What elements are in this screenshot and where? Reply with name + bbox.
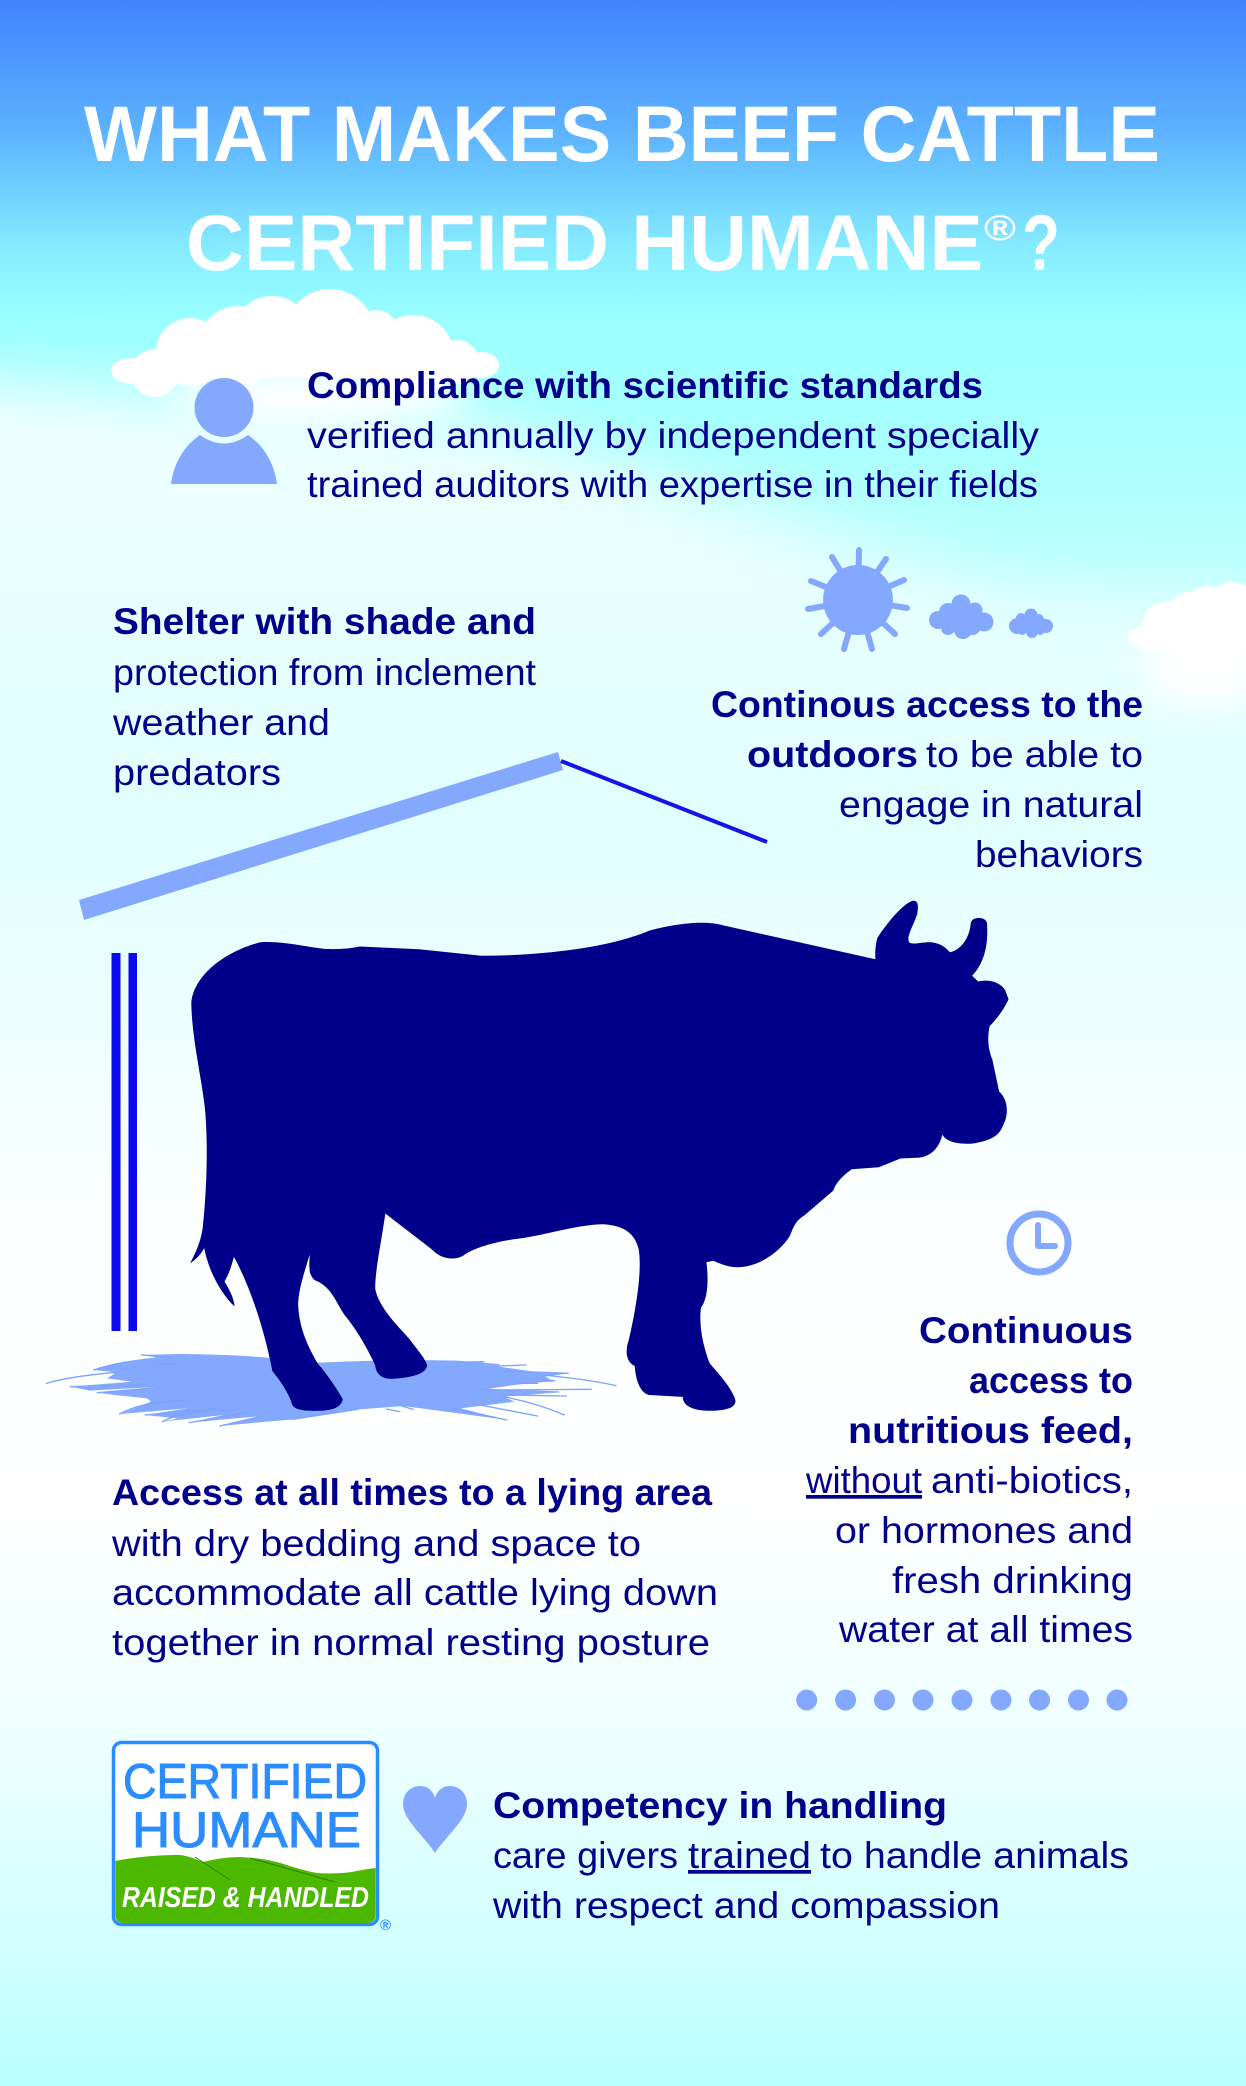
text: handling: trained	[688, 1835, 811, 1876]
text: shelter: weather and	[112, 702, 330, 743]
cloud: right edge	[1128, 582, 1246, 705]
text: nutritious feed: fresh drinking	[892, 1560, 1133, 1601]
title: ®	[984, 207, 1016, 248]
barn roof	[79, 752, 767, 920]
text: nutritious feed: water at all times	[838, 1609, 1133, 1650]
text: compliance	[307, 365, 1040, 505]
text: outdoors	[711, 684, 1143, 875]
text: handling: care givers	[493, 1835, 678, 1876]
text: compliance: verified annually by independent specially	[307, 415, 1040, 456]
text: outdoors: outdoors	[747, 734, 918, 775]
text: handling: with respect and compassion	[492, 1885, 1000, 1926]
logo: certified humane	[114, 1742, 391, 1934]
text: shelter: protection from inclement	[113, 652, 537, 693]
text: outdoors: to be able to	[926, 734, 1143, 775]
text: outdoors: behaviors	[975, 834, 1143, 875]
cloud: upper left	[111, 289, 499, 423]
text: lying area: together in normal resting posture	[112, 1622, 710, 1663]
text: nutritious feed: without	[805, 1460, 923, 1501]
logo: certified humane: ®	[380, 1917, 391, 1934]
text: outdoors: engage in natural	[839, 784, 1143, 825]
text: lying area	[111, 1472, 718, 1663]
icon: person	[171, 378, 277, 484]
text: shelter: Shelter with shade and	[113, 601, 536, 642]
title: ?	[1022, 198, 1060, 287]
text: nutritious feed: nutritious feed,	[848, 1410, 1133, 1451]
dotted divider	[796, 1690, 1128, 1710]
text: nutritious feed: Continuous	[919, 1310, 1133, 1351]
icon: large cloud	[929, 594, 994, 639]
text: lying area: accommodate all cattle lying down	[112, 1572, 718, 1613]
text: nutritious feed: anti-biotics,	[931, 1460, 1133, 1501]
cow silhouette	[190, 901, 1009, 1411]
text: handling: to handle animals	[820, 1835, 1129, 1876]
logo: certified humane: CERTIFIED	[123, 1755, 367, 1809]
pale veil across the sky	[0, 372, 1246, 860]
logo: certified humane: RAISED & HANDLED	[122, 1882, 369, 1914]
barn posts	[112, 953, 137, 1331]
icon: small cloud	[1009, 608, 1053, 638]
text: shelter	[112, 601, 537, 793]
text: nutritious feed	[805, 1310, 1133, 1650]
text: lying area: with dry bedding and space to	[111, 1523, 641, 1564]
straw bedding	[47, 1354, 616, 1426]
title	[84, 89, 1160, 287]
icon: sun	[808, 550, 907, 649]
text: handling: Competency in handling	[493, 1785, 947, 1826]
text: compliance: trained auditors with expertise in their fields	[307, 464, 1038, 505]
icon: clock	[1010, 1214, 1068, 1272]
text: nutritious feed: or hormones and	[835, 1510, 1133, 1551]
title: WHAT MAKES BEEF CATTLE	[84, 89, 1160, 178]
icon: heart	[403, 1786, 467, 1853]
text: compliance: Compliance with scientific standards	[307, 365, 983, 406]
text: outdoors: Continous access to the	[711, 684, 1143, 725]
logo: certified humane: HUMANE	[132, 1802, 361, 1858]
title: CERTIFIED HUMANE	[186, 198, 983, 287]
text: lying area: Access at all times to a lying area	[112, 1472, 712, 1513]
text: shelter: predators	[113, 752, 281, 793]
text: handling	[492, 1785, 1129, 1926]
text: nutritious feed: access to	[969, 1360, 1133, 1401]
